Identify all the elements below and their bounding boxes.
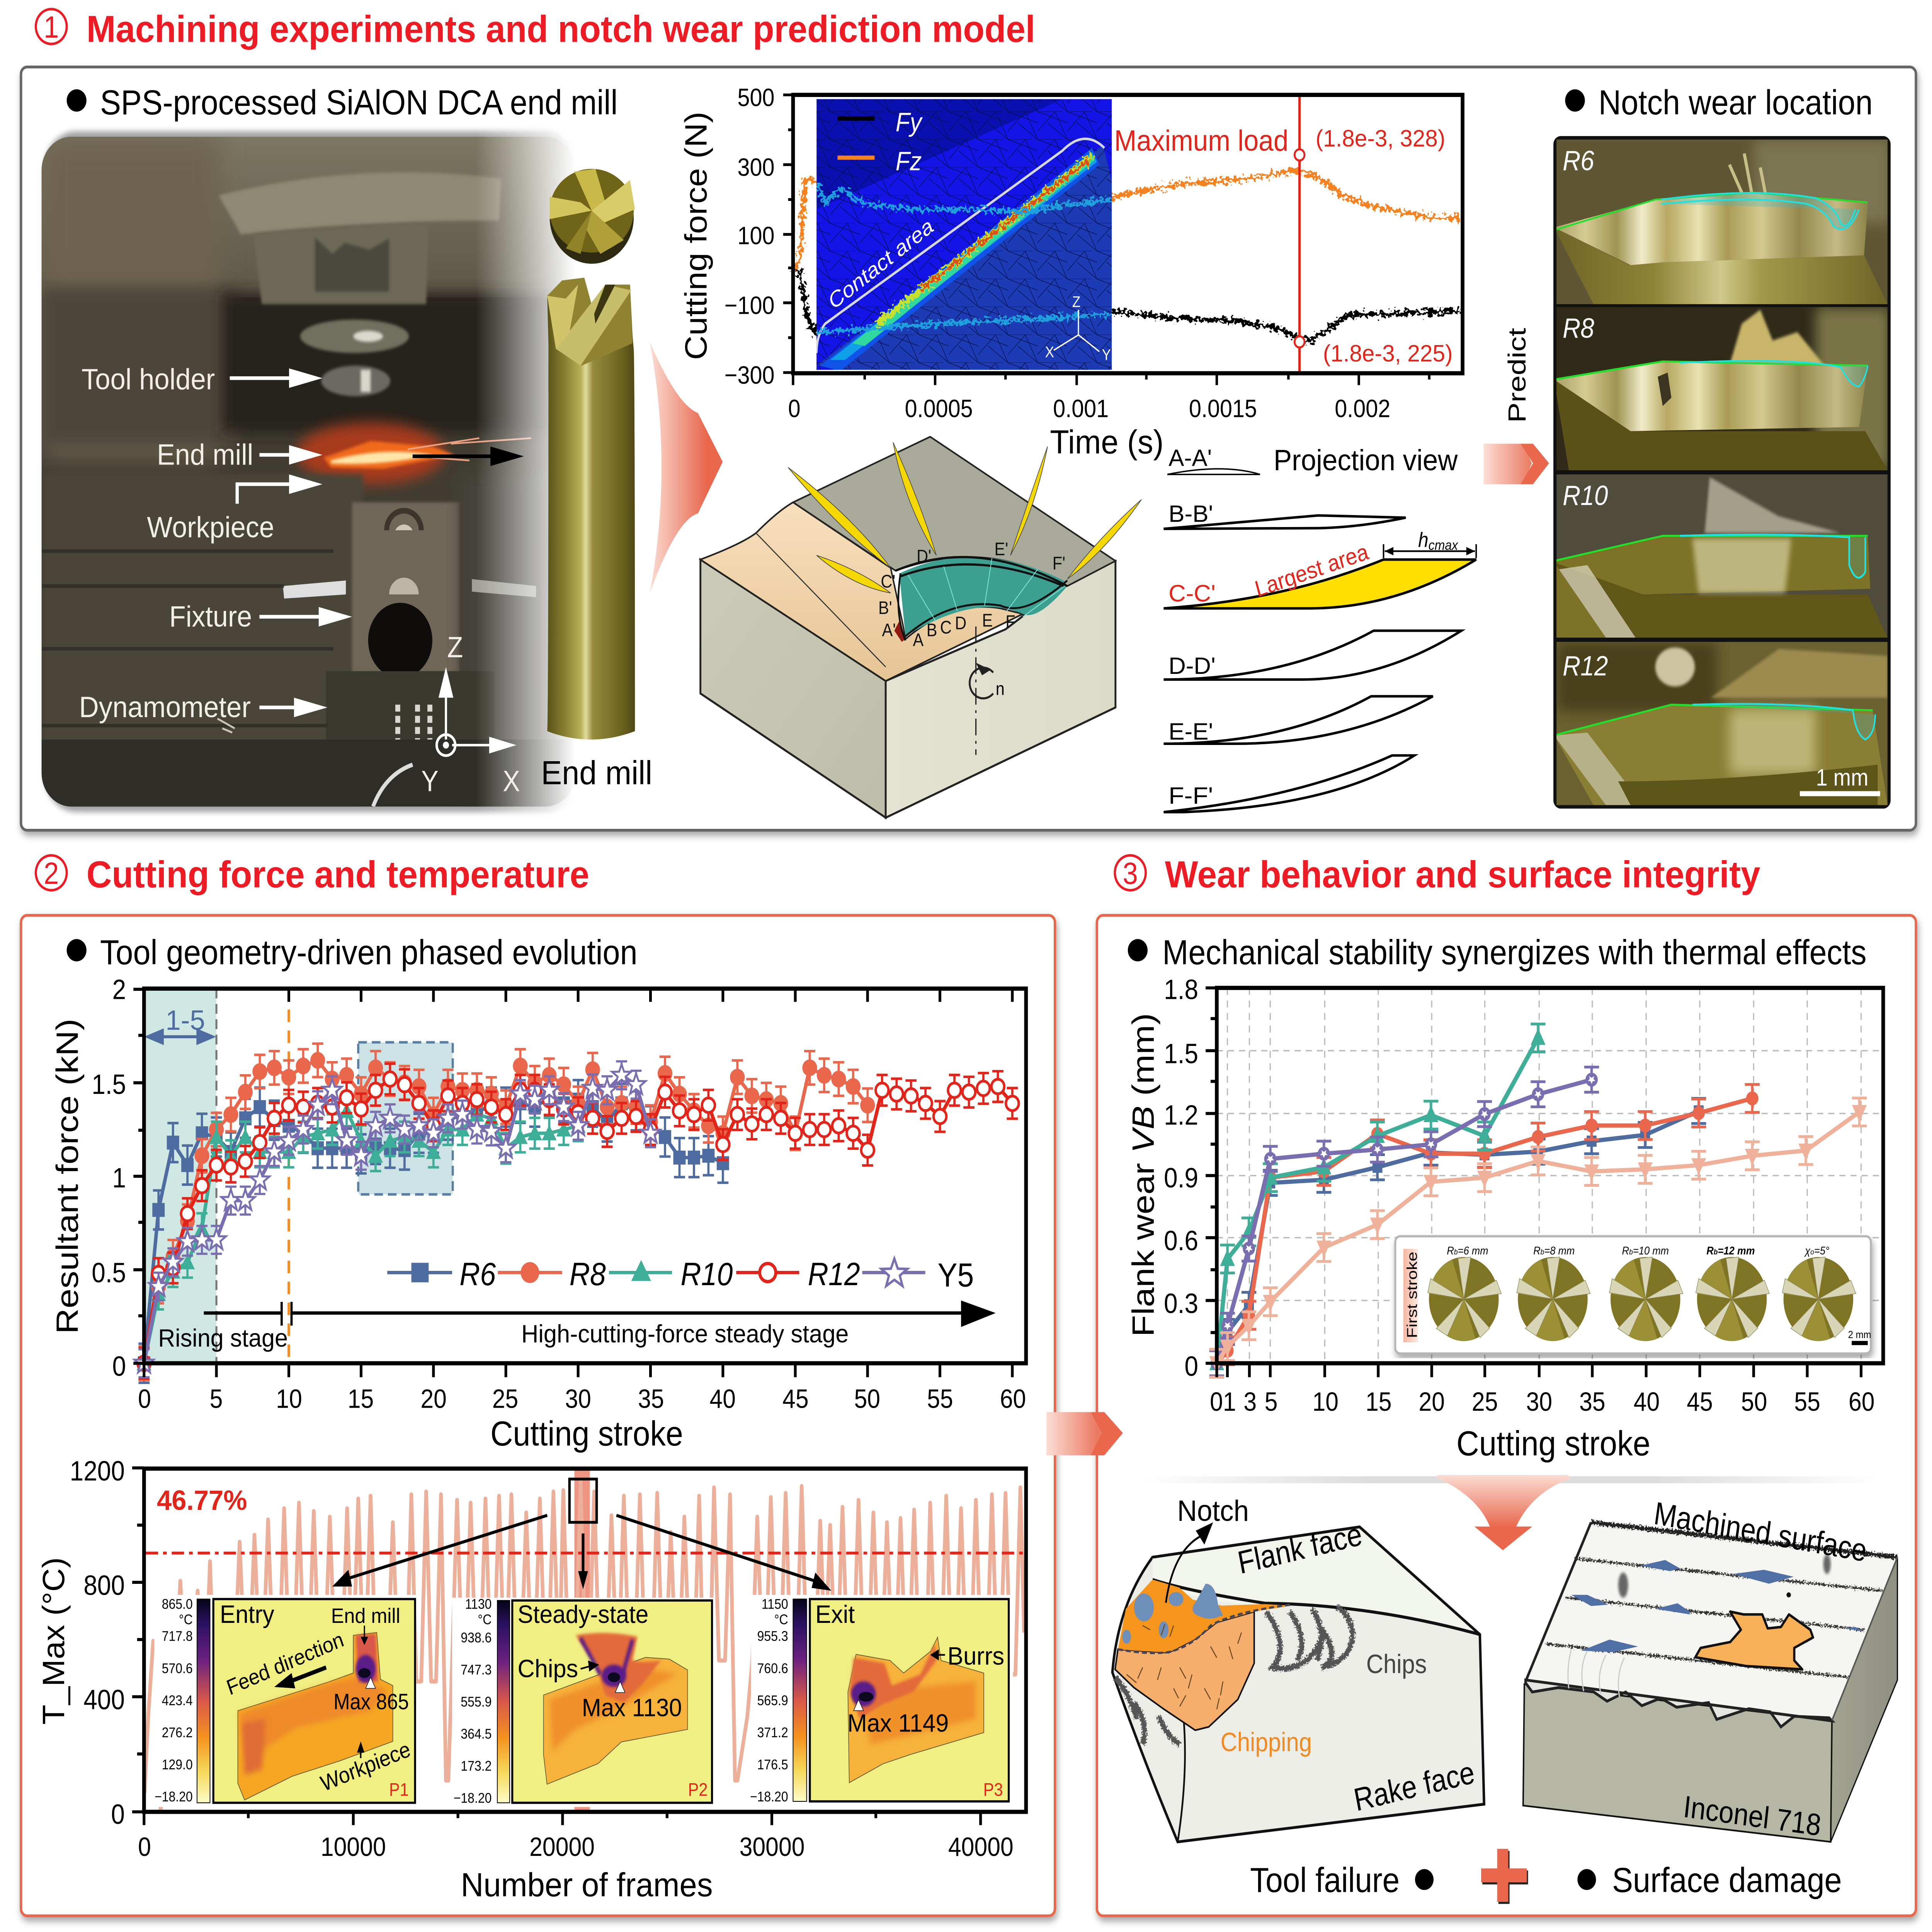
labels and arrows on photo: Fixture: [169, 600, 252, 633]
inset: thermal map P2 steady-state: Max 1130: [582, 1694, 682, 1722]
illustration: 3D cutting block: n: [996, 679, 1005, 699]
inset: thermal map P2 steady-state: [452, 1597, 714, 1807]
chart: resultant force: 40: [709, 1384, 736, 1413]
chart: cutting force: 0.0005: [905, 395, 973, 423]
chart: temperature T_Max vs frames: 1200: [70, 1456, 125, 1486]
chart: resultant force: 50: [854, 1384, 880, 1413]
inset: thermal map P2 steady-state: 555.9: [461, 1694, 492, 1710]
inset: first stroke tool photos: Rb=12 mm: [1706, 1244, 1755, 1257]
curve: Fy black: [793, 269, 1460, 342]
heading: notch wear location: Notch wear location: [1599, 83, 1873, 122]
chart: temperature T_Max vs frames: 10000: [321, 1832, 386, 1862]
annotation: maximum load: Maximum load: [1114, 124, 1288, 157]
annotation: strokes 1-5: [144, 1005, 216, 1045]
chart: cutting force: 0.0015: [1189, 395, 1257, 423]
inset: thermal map P2 steady-state: Chips: [518, 1655, 578, 1683]
legend: R6: [459, 1256, 496, 1292]
heading: SPS-processed end mill: SPS-processed SiAlON DCA end mill: [100, 83, 617, 122]
inset: thermal map P3 exit: P3: [983, 1780, 1003, 1800]
inset: thermal map P1 entry: Workpiece: [318, 1736, 413, 1796]
chart: resultant force: 15: [348, 1384, 374, 1413]
diagram: projection view sections: B-B': [1168, 501, 1213, 527]
photo: R12: 1 mm: [1816, 765, 1868, 791]
legend: R10: [681, 1256, 733, 1292]
illustration: machined workpiece: Inconel 718: [1682, 1789, 1823, 1842]
photo: R6: R6: [1563, 145, 1594, 176]
photo: R12: [1554, 642, 1888, 805]
inset: thermal map P1 entry: Max 865: [333, 1689, 409, 1714]
inset: thermal map P3 exit: Max 1149: [847, 1709, 949, 1737]
panel: section 3 frame: [1097, 915, 1916, 1916]
summary: tool failure plus surface damage: [1250, 1849, 1842, 1904]
illustration: tool failure: Rake face: [1351, 1754, 1477, 1818]
inset: contact area simulation: Fz: [896, 146, 922, 176]
chart: resultant force: Resultant force (kN): [50, 1019, 85, 1334]
series: sawtooth temperature: [145, 1482, 1024, 1811]
arrow: section 2 to section 3: [1046, 1412, 1123, 1455]
chart: flank wear: 25: [1472, 1386, 1498, 1417]
chart: resultant force: 1: [112, 1162, 126, 1194]
inset: contact area simulation: Y: [1102, 346, 1111, 363]
illustration: tool failure: Chipping: [1221, 1727, 1312, 1757]
inset: thermal map P1 entry: [155, 1595, 416, 1807]
inset: thermal map P3 exit: 176.5: [757, 1757, 788, 1772]
photo: R12: R12: [1563, 650, 1608, 682]
illustration: tool failure: Flank face: [1235, 1516, 1365, 1581]
chart: temperature T_Max vs frames: 0: [138, 1832, 151, 1862]
diagram: projection view sections: A-A': [1168, 445, 1212, 471]
inset: thermal map P1 entry: −18.20: [155, 1789, 193, 1804]
illustration: tool failure: Chips: [1366, 1649, 1427, 1679]
title: section 2: Cutting force and temperature: [87, 854, 589, 896]
title: section 3: Wear behavior and surface integrity: [1165, 854, 1760, 896]
annotation: maximum load: (1.8e-3, 225): [1323, 340, 1453, 367]
legend: [387, 1256, 974, 1294]
illustration: tool failure: [1112, 1495, 1484, 1842]
illustration: 3D cutting block: F: [1005, 612, 1015, 632]
inset: thermal map P3 exit: Exit: [815, 1600, 855, 1629]
labels and arrows on photo: Tool holder: [82, 363, 215, 396]
illustration: 3D cutting block: A': [882, 620, 896, 640]
illustration: 3D cutting block: D: [955, 613, 966, 633]
title: section 2: 2: [44, 856, 59, 891]
curve: Fz orange: [793, 170, 1460, 271]
inset: first stroke tool photos: First stroke: [1405, 1252, 1420, 1338]
chart: resultant force: 60: [1000, 1384, 1026, 1413]
crack lines: [1545, 1559, 1883, 1677]
inset: thermal map P3 exit: Burrs: [947, 1642, 1004, 1670]
arrow: predict: Predict: [1503, 328, 1531, 423]
illustration: 3D cutting block: C': [881, 571, 895, 592]
panel: section 2 frame: [21, 915, 1055, 1916]
chart: resultant force: 2: [112, 974, 126, 1005]
chart: flank wear: 40: [1634, 1386, 1660, 1417]
chart: resultant force: 20: [420, 1384, 447, 1413]
panel: notch wear photographs: [1554, 138, 1890, 807]
chart: resultant force: 5: [210, 1384, 223, 1413]
inset: thermal map P3 exit: 1150: [762, 1597, 788, 1612]
annotation: strokes 1-5: 1-5: [165, 1005, 205, 1036]
heading: tool geometry: Tool geometry-driven phased evolution: [100, 933, 638, 972]
chart: flank wear: 01: [1210, 1386, 1236, 1417]
diagram: projection view sections: cmax: [1429, 537, 1459, 553]
diagram: projection view sections: Largest area: [1252, 538, 1371, 602]
inset: thermal map P2 steady-state: −18.20: [454, 1791, 492, 1806]
inset: thermal map P2 steady-state: 364.5: [461, 1726, 492, 1742]
stage arrow: High-cutting-force steady stage: [521, 1320, 849, 1348]
chart: cutting force: −100: [724, 291, 774, 320]
diagram: projection view sections: h: [1418, 528, 1429, 551]
illustration: machined workpiece: [1523, 1495, 1897, 1842]
illustration: 3D cutting block: A: [913, 630, 924, 650]
inset: thermal map P1 entry: 276.2: [162, 1725, 193, 1740]
chart: flank wear: 1.5: [1164, 1038, 1198, 1070]
inset: contact area simulation: Contact area: [824, 214, 937, 314]
illustration: 3D cutting block: C: [940, 617, 952, 638]
icon: end mill top view: [550, 169, 635, 264]
chart: flank wear: 20: [1418, 1386, 1445, 1417]
inset: thermal map P1 entry: 423.4: [162, 1693, 193, 1708]
inset: first stroke tool photos: [1395, 1236, 1871, 1354]
inset: thermal map P3 exit: °C: [774, 1612, 788, 1628]
inset: thermal map P1 entry: 570.6: [162, 1661, 193, 1676]
chart: flank wear: 0.6: [1164, 1225, 1198, 1256]
summary: tool failure plus surface damage: Tool failure: [1250, 1861, 1400, 1900]
chart: resultant force: 1.5: [92, 1069, 126, 1100]
yellow cutting flames: [788, 442, 1141, 593]
chart: temperature T_Max vs frames: 20000: [529, 1832, 595, 1862]
divider and down arrow: [1143, 1475, 1879, 1550]
chart: resultant force: 55: [927, 1384, 953, 1413]
inset: thermal map P3 exit: [750, 1595, 1013, 1807]
chart: cutting force: Time (s): [1050, 423, 1164, 461]
chart: flank wear: Flank wear VB (mm): [1126, 1013, 1161, 1337]
inset: thermal map P2 steady-state: °C: [478, 1612, 492, 1628]
summary: tool failure plus surface damage: Surface damage: [1612, 1861, 1842, 1900]
illustration: 3D cutting block: E: [982, 611, 993, 631]
chart: flank wear: [1126, 974, 1883, 1463]
labels and arrows on photo: Z: [447, 631, 463, 664]
chart: cutting force: 100: [737, 222, 774, 250]
illustration: 3D cutting block: B': [878, 598, 892, 618]
photo: R8: [1554, 307, 1890, 470]
chart: flank wear: 15: [1366, 1386, 1392, 1417]
chart: cutting force: Cutting force (N): [679, 112, 713, 360]
chart: flank wear: 55: [1794, 1386, 1820, 1417]
legend: Y5: [937, 1257, 974, 1294]
chart: flank wear: 0: [1184, 1351, 1198, 1382]
chart: cutting force: [679, 83, 1463, 461]
chart: temperature T_Max vs frames: 46.77%: [157, 1485, 247, 1516]
illustration: tool failure: Notch: [1177, 1495, 1249, 1527]
inset: thermal map P2 steady-state: P2: [688, 1780, 708, 1800]
chart: cutting force: 500: [737, 83, 774, 112]
chart: flank wear: Cutting stroke: [1456, 1424, 1650, 1463]
inset: thermal map P1 entry: Entry: [220, 1600, 274, 1629]
chart: temperature T_Max vs frames: Number of frames: [461, 1866, 713, 1904]
diagram: projection view sections: E-E': [1168, 719, 1213, 745]
inset: thermal map P1 entry: 865.0: [162, 1597, 193, 1612]
chart: resultant force: 0: [138, 1384, 151, 1413]
inset: thermal map P3 exit: 955.3: [757, 1629, 788, 1644]
inset: thermal map P3 exit: 371.2: [757, 1725, 788, 1740]
inset: first stroke tool photos: Rb=6 mm: [1447, 1244, 1488, 1257]
title: section 3: 3: [1123, 856, 1138, 891]
illustration: 3D cutting block: B: [927, 620, 937, 640]
legend: R8: [570, 1256, 606, 1292]
inset: thermal map P1 entry: Feed direction: [224, 1628, 347, 1700]
photo: R10: [1554, 474, 1888, 638]
photo: R10: R10: [1563, 480, 1608, 511]
inset: thermal map P2 steady-state: 1130: [465, 1597, 492, 1612]
diagram: projection view sections: [1164, 444, 1476, 812]
diagram: projection view sections: F-F': [1168, 783, 1213, 809]
inset: thermal map P2 steady-state: 747.3: [461, 1662, 492, 1678]
photo: R6: [1554, 139, 1890, 304]
photo: R8: R8: [1563, 313, 1594, 344]
annotation: maximum load: (1.8e-3, 328): [1316, 126, 1445, 152]
inset: thermal map P2 steady-state: 938.6: [461, 1630, 492, 1646]
chart: resultant force: 0: [112, 1351, 126, 1382]
chart: cutting force: 0.002: [1335, 395, 1390, 423]
chart: cutting force: 0: [788, 395, 801, 423]
chart: resultant force: 30: [565, 1384, 591, 1413]
inset: thermal map P3 exit: 565.9: [757, 1693, 788, 1708]
illustration: 3D cutting block: D': [917, 546, 931, 566]
chart: temperature T_Max vs frames: [37, 1456, 1026, 1904]
chart: resultant force: 25: [492, 1384, 518, 1413]
chart: flank wear: 1.8: [1164, 974, 1198, 1005]
chart: flank wear: 50: [1741, 1386, 1767, 1417]
panel: section 1 frame: [21, 67, 1916, 830]
chart: temperature T_Max vs frames: 400: [83, 1684, 125, 1716]
inset: thermal map P1 entry: 129.0: [162, 1757, 193, 1772]
inset: thermal map P1 entry: End mill: [331, 1604, 400, 1627]
labels and arrows on photo: Y: [421, 765, 439, 798]
chart: flank wear: 3: [1243, 1386, 1257, 1417]
illustration: machined workpiece: Machined surface: [1652, 1495, 1869, 1568]
illustration: 3D cutting block: E': [995, 539, 1008, 560]
diagram: projection view sections: C-C': [1168, 580, 1216, 607]
chart: flank wear: 30: [1526, 1386, 1552, 1417]
data series: [144, 1060, 1012, 1363]
chart: resultant force: Cutting stroke: [490, 1415, 683, 1453]
chart: flank wear: 1.2: [1164, 1100, 1198, 1131]
chart: flank wear: 45: [1687, 1386, 1713, 1417]
labels and arrows on photo: X: [503, 765, 520, 798]
inset: contact area simulation: Fy: [896, 107, 923, 137]
chips debris: [1116, 1607, 1353, 1744]
chart: flank wear: 0.9: [1164, 1162, 1198, 1194]
illustration: 3D cutting block: [701, 437, 1141, 818]
chart: flank wear: 35: [1579, 1386, 1605, 1417]
inset: first stroke tool photos: Rb=8 mm: [1533, 1244, 1575, 1257]
arrow: photo to chart: [650, 342, 723, 593]
labels and arrows on photo: [79, 363, 524, 798]
stage arrow: [158, 1301, 996, 1352]
chart: temperature T_Max vs frames: 30000: [740, 1832, 805, 1862]
inset: thermal map P2 steady-state: Steady-state: [518, 1600, 648, 1629]
chart: flank wear: 5: [1265, 1386, 1278, 1417]
inset: thermal map P2 steady-state: 173.2: [461, 1759, 492, 1774]
inset: contact area simulation: [816, 99, 1112, 371]
inset: first stroke tool photos: 2 mm: [1848, 1329, 1871, 1340]
stage arrow: Rising stage: [158, 1324, 288, 1352]
chart: resultant force: 45: [782, 1384, 809, 1413]
labels and arrows on photo: Workpiece: [147, 511, 274, 544]
diagram: projection view sections: D-D': [1168, 653, 1216, 679]
inset: first stroke tool photos: χo=5°: [1804, 1244, 1829, 1257]
chart: temperature T_Max vs frames: T_Max (°C): [37, 1557, 71, 1725]
title: section 1: Machining experiments and notch wear prediction model: [87, 8, 1035, 50]
legend: R12: [808, 1256, 860, 1292]
data series: [1217, 1038, 1859, 1363]
labels and arrows on photo: Dynamometer: [79, 691, 251, 724]
inset: thermal map P1 entry: °C: [179, 1612, 193, 1628]
illustration: end mill body: [547, 278, 635, 740]
chart: resultant force: [50, 974, 1026, 1453]
inset: contact area simulation: Z: [1072, 293, 1080, 310]
title: section 1: 1: [44, 10, 59, 44]
chart: cutting force: 0.001: [1053, 395, 1109, 423]
label: End mill: End mill: [541, 754, 652, 792]
chart: resultant force: 10: [276, 1384, 302, 1413]
chart: cutting force: −300: [724, 361, 774, 389]
inset: thermal map P1 entry: P1: [389, 1780, 409, 1800]
chart: temperature T_Max vs frames: 40000: [948, 1832, 1014, 1862]
illustration: 3D cutting block: F': [1053, 553, 1065, 573]
chart: flank wear: 60: [1849, 1386, 1875, 1417]
heading: mechanical stability: Mechanical stability synergizes with thermal effects: [1162, 933, 1867, 972]
diagram: projection view sections: Projection view: [1274, 444, 1458, 477]
inset: contact area simulation: X: [1045, 343, 1054, 361]
chart: flank wear: 0.3: [1164, 1288, 1198, 1319]
chart: resultant force: 0.5: [92, 1257, 126, 1289]
chart: temperature T_Max vs frames: 0: [111, 1799, 125, 1830]
inset: thermal map P3 exit: −18.20: [750, 1789, 788, 1804]
chart: resultant force: 35: [638, 1384, 664, 1413]
chart: cutting force: 300: [737, 153, 774, 182]
photo: machining setup: [41, 131, 593, 812]
annotation: maximum load: [1114, 95, 1453, 372]
inset: thermal map P1 entry: 717.8: [162, 1629, 193, 1644]
chart: temperature T_Max vs frames: 800: [83, 1570, 125, 1601]
labels and arrows on photo: End mill: [157, 439, 253, 471]
inset: thermal map P3 exit: 760.6: [757, 1661, 788, 1676]
arrows: zoom lines to insets: [332, 1515, 832, 1591]
inset: first stroke tool photos: Rb=10 mm: [1622, 1244, 1669, 1257]
arrow: predict: [1484, 328, 1549, 484]
chart: flank wear: 10: [1313, 1386, 1338, 1417]
